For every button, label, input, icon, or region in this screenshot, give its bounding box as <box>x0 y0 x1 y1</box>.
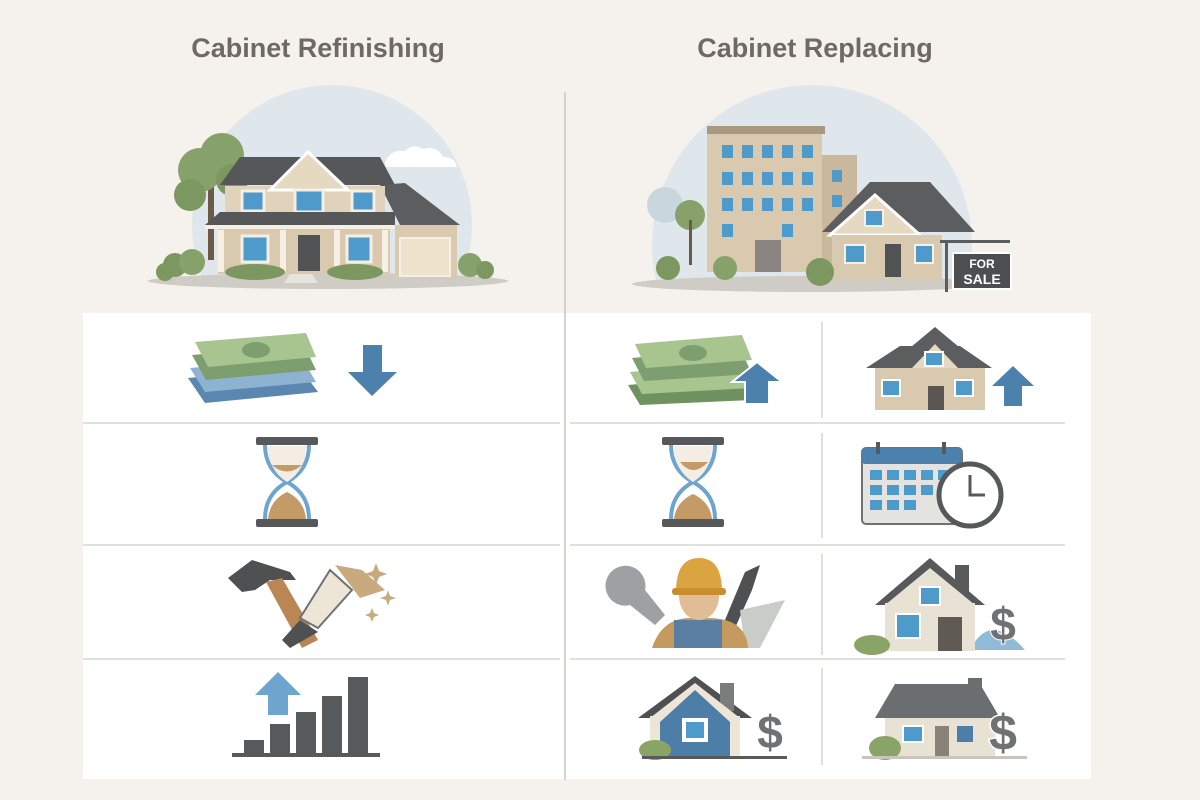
divider vertical <box>564 92 566 315</box>
icon: grey house with dollar: $ <box>989 705 1017 761</box>
sign: FOR SALE: SALE <box>963 271 1001 287</box>
icon: house value up <box>866 327 1034 410</box>
icon: house with dollar and blue ground: $ <box>990 598 1016 650</box>
icon: money stack with up arrow <box>628 335 782 405</box>
icon: money stack left <box>188 333 318 403</box>
icon: house with dollar and blue ground <box>854 558 1025 655</box>
panel: comparison table <box>83 313 1091 780</box>
illustration: suburban house <box>148 85 508 289</box>
icon: hourglass right <box>662 437 724 527</box>
icon: bar chart with arrow up <box>232 672 380 757</box>
icon: blue house with dollar <box>638 676 787 760</box>
illustration: apartment building and house for sale <box>632 85 1012 292</box>
icon: arrow down <box>348 345 397 396</box>
icon: grey house with dollar <box>862 678 1027 761</box>
sign: FOR SALE <box>953 253 1011 289</box>
icon: hourglass left <box>256 437 318 527</box>
icon: blue house with dollar: $ <box>757 706 783 758</box>
icon: worker with tools <box>605 558 785 648</box>
title: Cabinet Replacing: Cabinet Replacing <box>697 33 933 63</box>
icon: hammer and paintbrush <box>228 560 396 648</box>
icon: calendar with clock <box>862 442 1001 526</box>
sign: FOR SALE: FOR <box>969 257 995 271</box>
title: Cabinet Refinishing: Cabinet Refinishing <box>191 33 445 63</box>
